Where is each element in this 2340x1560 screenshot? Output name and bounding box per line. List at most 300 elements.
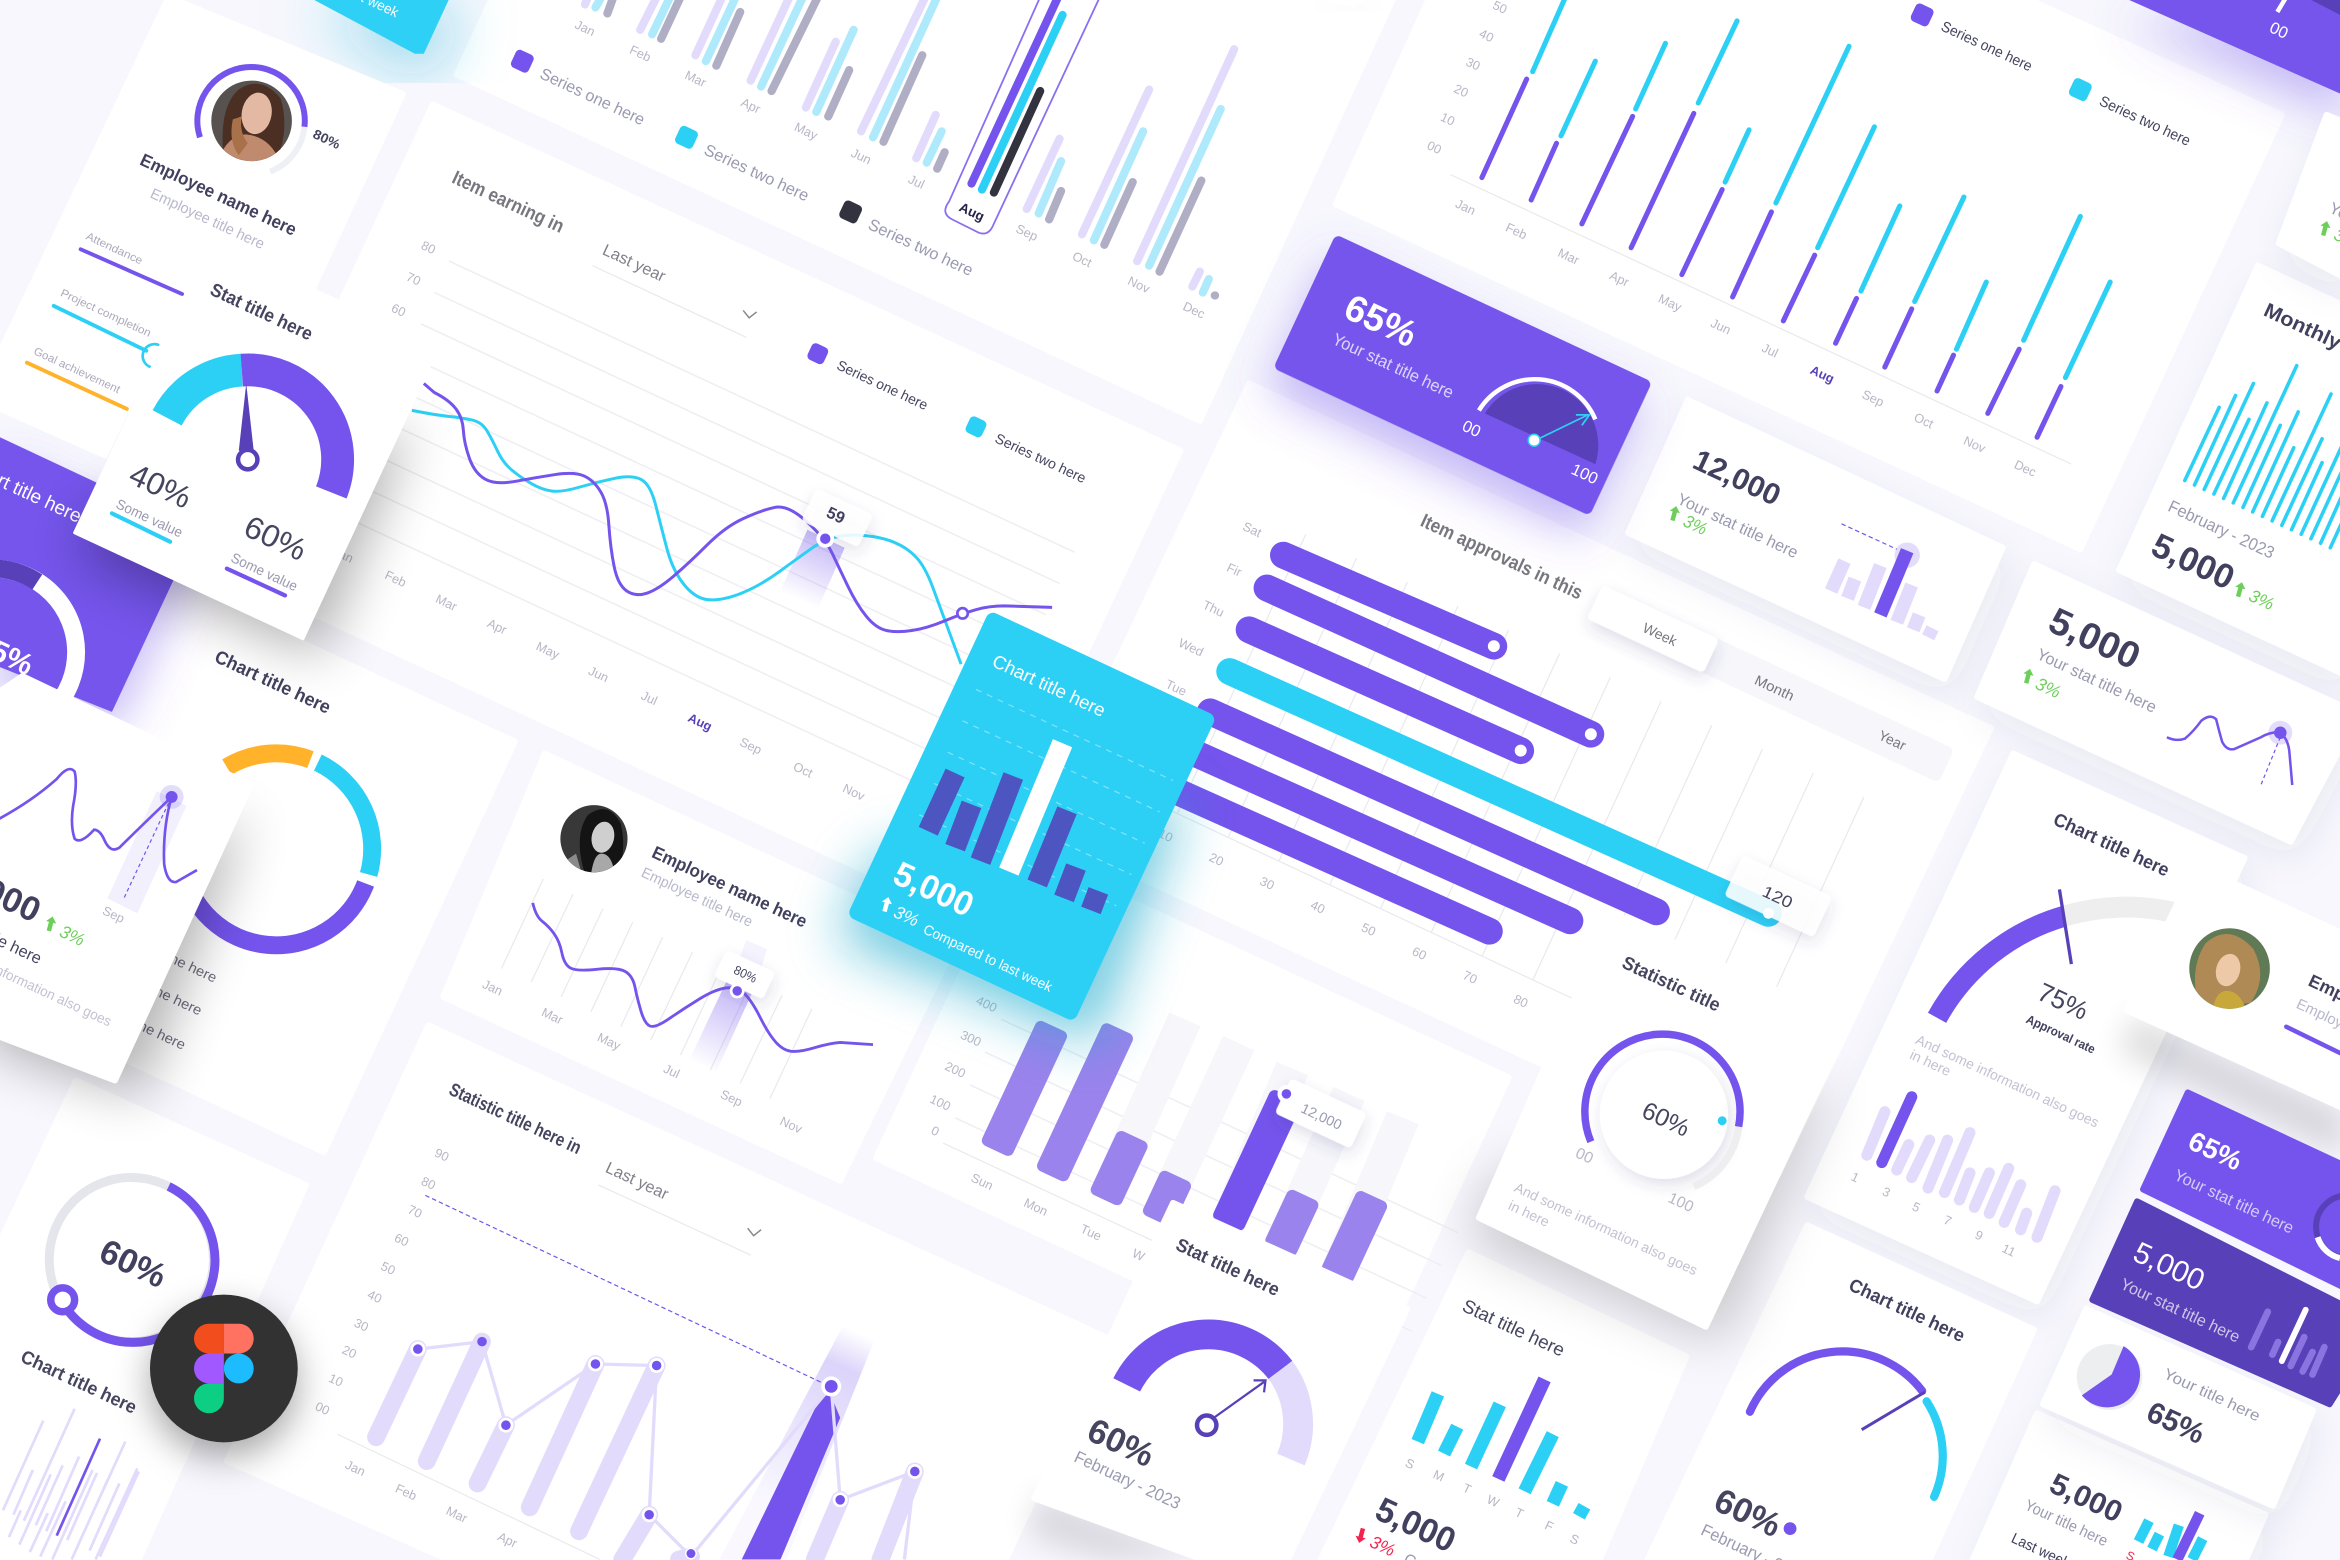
connecting line — [418, 1342, 915, 1560]
progress — [2286, 1027, 2340, 1058]
month labels: Dec — [1181, 299, 1207, 322]
panel: 5,000 compact card: Your title here — [2022, 1497, 2111, 1550]
day labels — [1163, 519, 1264, 699]
change — [879, 896, 922, 931]
panel: statistic ring card: Statistic title — [1619, 952, 1724, 1015]
progress: project completion — [54, 287, 158, 367]
heading: Item approvals in this — [1417, 510, 1586, 604]
heading: Item earning in — [449, 167, 567, 238]
day labels: Thu — [1200, 598, 1226, 620]
purple bar segments — [1482, 79, 2061, 437]
panel: stacked bar chart top right — [1336, 0, 2282, 549]
cyan card glow — [836, 798, 1186, 1045]
x axis labels: May — [1656, 292, 1684, 315]
x axis labels: Dec — [2012, 457, 2038, 480]
y axis labels — [389, 238, 438, 320]
day labels: S — [1403, 1456, 1417, 1472]
day labels: Mon — [1022, 1196, 1050, 1219]
x axis labels: Apr — [495, 1530, 520, 1551]
day labels: Wed — [1130, 1246, 1159, 1270]
legend: Series one here — [1938, 18, 2035, 75]
marker — [1784, 1522, 1796, 1535]
legend — [509, 48, 976, 280]
panel: purple 65% gauge stat card: 65% — [1338, 286, 1424, 355]
x axis labels: 30 — [1258, 874, 1276, 893]
panel: statistic title here line chart: Statistic title here in — [446, 1078, 585, 1158]
gauge: 100 — [1568, 460, 1601, 488]
day labels: M — [1431, 1467, 1446, 1485]
panel: purple 65% stat card right: Your stat title here — [2171, 1166, 2296, 1237]
cyan bar segments — [1533, 0, 2110, 378]
x axis labels: Apr — [485, 616, 510, 638]
tabs: Year — [1876, 728, 1908, 754]
bar chart: 5 — [1910, 1199, 1922, 1215]
value: 12,000 — [1688, 444, 1786, 513]
pie chart — [2077, 1344, 2142, 1410]
month labels: Sep — [1014, 222, 1040, 244]
month labels: Mar — [539, 1005, 566, 1028]
panel: employee card right — [2127, 866, 2340, 1109]
employee card shadow — [2119, 1015, 2340, 1157]
change: 3% — [1680, 511, 1710, 539]
icon: figma logo badge — [150, 1295, 298, 1442]
panel: statistic ring card: 00 — [1573, 1145, 1596, 1168]
dropdown: Last year — [603, 1159, 672, 1204]
tooltip 120 — [1724, 855, 1832, 937]
dropdown: Last year — [600, 241, 669, 286]
month labels: Jul — [661, 1062, 682, 1081]
month labels: Jan — [480, 977, 505, 999]
panel: statistic ring card: in here — [1506, 1198, 1552, 1231]
panel: chart ring 60% bottom left: Chart title here — [18, 1346, 140, 1418]
legend: Series one here — [118, 928, 219, 987]
month labels: Jun — [849, 146, 873, 167]
legend: Series one here — [537, 65, 647, 129]
x axis labels: May — [534, 639, 562, 662]
x axis labels: Feb — [1503, 220, 1529, 242]
avatar — [2189, 928, 2270, 1009]
bar chart: 9 — [1973, 1228, 1985, 1244]
panel: statistic ring card: And some information also goes — [1512, 1180, 1700, 1279]
x axis labels: Jan — [331, 544, 355, 566]
panel: series bar chart top — [457, 0, 1394, 421]
avatar with progress ring — [197, 67, 343, 172]
y axis labels: 10 — [1438, 110, 1457, 129]
month labels: Feb — [627, 43, 653, 65]
panel: cyan chart card: Compared to last week — [921, 922, 1055, 996]
small card top edge — [1313, 0, 1365, 7]
avatar with progress ring: 80% — [311, 126, 343, 152]
bars — [1418, 1379, 1584, 1516]
panel: cyan card top — [267, 0, 451, 54]
panel: 75% approval gauge — [1807, 754, 2244, 1301]
x axis labels — [331, 544, 867, 804]
progress: goal achievement — [27, 346, 127, 409]
negative change — [1354, 1527, 1398, 1560]
x axis labels — [1453, 197, 2038, 480]
legend — [806, 342, 1088, 487]
gauge — [1459, 379, 1601, 488]
change — [2233, 581, 2277, 614]
donut — [182, 753, 372, 945]
month labels: May — [792, 120, 820, 143]
panel: sparkline stat card left — [0, 676, 251, 1080]
x axis labels: Nov — [1961, 434, 1988, 456]
month labels: Mar — [683, 68, 709, 90]
x axis labels: Mar — [1556, 246, 1582, 268]
y axis labels: 30 — [352, 1316, 371, 1335]
panel: statistic ring card — [1479, 913, 1849, 1327]
x axis labels: Oct — [1912, 410, 1936, 432]
day labels: T — [1461, 1481, 1474, 1497]
panel: chart gauge 60% bottom: Chart title here — [1846, 1274, 1968, 1346]
highlighted column — [780, 530, 845, 609]
note: And some information also goes — [1913, 1032, 2101, 1131]
tabs — [1587, 585, 1954, 783]
x axis labels: Apr — [1607, 269, 1632, 290]
month labels: Sep — [718, 1087, 744, 1109]
change — [2021, 667, 2064, 702]
month labels: Jul — [906, 172, 927, 192]
x axis labels: Oct — [791, 760, 815, 781]
y axis labels — [1425, 0, 1509, 157]
panel: item earning line chart — [216, 104, 1180, 916]
month labels: Apr — [739, 95, 763, 117]
tooltip 80%: 80% — [731, 963, 759, 986]
month labels: Nov — [1125, 274, 1152, 296]
y axis labels: 20 — [340, 1343, 359, 1361]
progress: attendance — [81, 231, 182, 294]
bar chart — [1849, 1097, 2055, 1260]
panel: cyan chart card: 5,000 — [888, 855, 979, 925]
y axis labels: 300 — [958, 1028, 983, 1049]
day labels — [1403, 1456, 1581, 1548]
bars — [376, 1342, 915, 1560]
panel: chart gauge 60% bottom: 60% — [1708, 1482, 1787, 1545]
x axis labels: Feb — [383, 568, 408, 590]
panel: 5,000 compact card — [1973, 1413, 2265, 1560]
x axis labels: Nov — [840, 781, 867, 804]
tabs: Week — [1640, 620, 1680, 650]
cyan series line — [412, 410, 961, 664]
panel: chart ring 60% bottom left — [0, 1080, 306, 1560]
gauge card shadow — [82, 425, 410, 657]
label 00 top right — [2267, 0, 2340, 43]
bar chart: 1 — [1849, 1170, 1861, 1185]
panel: stat bars S M T W: Stat title here — [1459, 1295, 1568, 1361]
x axis labels: Aug — [686, 711, 714, 734]
highlighted month: Aug: Aug — [957, 200, 987, 224]
panel: purple 65% stat card right — [2143, 1092, 2340, 1288]
legend: Series one here — [86, 995, 188, 1054]
open marker — [957, 608, 968, 619]
y axis labels: 0 — [929, 1123, 941, 1139]
y axis labels: 20 — [1452, 82, 1470, 100]
y axis labels: 50 — [379, 1259, 397, 1278]
panel: dark purple 5,000 stat card — [2092, 1201, 2340, 1404]
panel: chart donut left: Chart title here — [212, 646, 334, 718]
month labels: Nov — [778, 1114, 805, 1137]
gauge — [1127, 1334, 1298, 1460]
day labels: Sat — [1240, 519, 1264, 540]
panel: dark purple 5,000 stat card: Your stat title here — [2117, 1275, 2243, 1346]
value: 5,000 — [2146, 526, 2240, 597]
x axis labels: Feb — [393, 1481, 419, 1503]
gauge: 00 — [1459, 417, 1483, 441]
highlight column — [689, 977, 754, 1072]
role: Employee title here — [148, 185, 267, 253]
panel: stat gauge 60% center: February - 2023 — [1071, 1447, 1184, 1513]
highlighted month: Aug — [945, 0, 1100, 234]
ring — [0, 568, 76, 736]
bar chart: 3 — [1880, 1185, 1892, 1200]
markers — [410, 1337, 922, 1560]
day labels: Wed — [1176, 636, 1206, 659]
heading: Chart title here — [2050, 808, 2173, 880]
panel: 5,000 sparkline stat card — [1977, 564, 2340, 842]
day labels: Sun — [969, 1171, 995, 1193]
day labels — [969, 1171, 1159, 1270]
role: Employee title here — [639, 864, 755, 931]
panel: stat gauge card: Stat title here — [207, 279, 316, 344]
change: 3% — [57, 921, 88, 950]
panel: cyan chart card — [847, 610, 1217, 1022]
y axis labels: 400 — [974, 994, 999, 1015]
change — [1667, 505, 1710, 539]
progress: attendance: Attendance — [84, 231, 144, 267]
y axis labels: 60 — [392, 1231, 411, 1249]
bar chart: 11 — [2000, 1241, 2018, 1260]
month labels: Jan — [573, 18, 597, 39]
sparkline card shadow — [0, 813, 246, 1097]
subtitle: Your stat title here — [2034, 645, 2159, 717]
horizontal bars — [1149, 555, 1768, 931]
statistic ring card shadow — [1470, 1082, 1828, 1343]
tooltip 12,000 — [1275, 1078, 1367, 1149]
panel: stat gauge card: Some value — [113, 497, 185, 541]
gauge — [167, 370, 338, 492]
panel: 5,000 compact card: 5,000 — [2045, 1467, 2127, 1529]
tabs: Month — [1752, 673, 1796, 705]
x axis labels: 20 — [1207, 850, 1226, 869]
legend: Series one here — [103, 961, 204, 1019]
dropdown — [598, 1159, 761, 1255]
panel: purple 65% stat card right: 65% — [2184, 1125, 2247, 1176]
panel: employee mini line chart — [482, 805, 874, 1132]
x axis labels: 80 — [1511, 992, 1530, 1011]
x axis labels — [1156, 826, 1530, 1011]
label: Approval rate — [2024, 1012, 2097, 1057]
progress: project completion: Project completion — [58, 287, 153, 340]
legend: Series two here — [2097, 93, 2193, 150]
y axis labels: 30 — [1464, 55, 1482, 73]
curve — [533, 903, 873, 1051]
background columns — [1104, 1019, 1403, 1277]
panel: item approvals chart — [1037, 384, 1991, 1174]
tooltip 120: 120 — [1759, 883, 1795, 912]
gauge arc — [1937, 889, 2177, 1018]
sparkline — [0, 769, 197, 913]
y axis labels — [928, 994, 999, 1139]
sparkline — [2167, 717, 2292, 785]
x axis labels: 40 — [1308, 898, 1327, 917]
bars — [2185, 366, 2340, 548]
y axis labels: 80 — [419, 1174, 438, 1193]
bars: light series — [585, 0, 1234, 295]
panel: stat gauge 60% center: 60% — [1082, 1411, 1160, 1475]
mini bar chart — [1831, 524, 1933, 637]
x axis labels — [343, 1458, 520, 1551]
highlighted bar — [742, 1392, 840, 1560]
y axis labels: 200 — [943, 1059, 968, 1081]
name: Employee name here — [137, 150, 300, 240]
x axis labels: Jun — [586, 664, 611, 685]
day labels: F — [1543, 1518, 1556, 1534]
y axis labels: 70 — [404, 270, 423, 288]
negative change: 3% — [1367, 1532, 1398, 1560]
date: February - 2023 — [2165, 496, 2278, 563]
panel: chart ring 60% bottom left: 60% — [94, 1232, 172, 1296]
panel: purple donut card left — [0, 437, 197, 736]
panel: employee card top left — [24, 33, 384, 458]
month labels — [573, 18, 1207, 322]
x axis labels: Jan — [343, 1458, 367, 1479]
panel: stat bars S M T W: 5,000 — [1370, 1491, 1461, 1560]
panel: your title pie card: 65% — [2142, 1396, 2210, 1451]
subtitle: Your stat title here — [1674, 490, 1801, 562]
panel: purple stat card top right — [2119, 0, 2340, 96]
panel: weekly column chart — [876, 849, 1509, 1386]
panel: dark purple 5,000 stat card: 5,000 — [2128, 1236, 2210, 1297]
y axis labels: 00 — [1425, 138, 1443, 157]
x axis labels: 60 — [1410, 944, 1429, 963]
y axis labels: 10 — [326, 1371, 345, 1390]
mini bars — [2124, 1513, 2203, 1560]
legend: Series two here — [992, 431, 1088, 487]
panel: stat gauge card — [75, 243, 439, 639]
x axis labels: Jul — [639, 689, 659, 708]
panel: stat gauge card: Some value — [228, 550, 300, 595]
y axis labels: 70 — [406, 1202, 424, 1221]
change — [44, 915, 88, 950]
ring — [49, 1177, 215, 1342]
x axis labels: Jun — [1708, 316, 1733, 337]
columns — [980, 1019, 1389, 1285]
progress: goal achievement: Goal achievement — [32, 346, 123, 397]
y axis labels: 40 — [365, 1288, 384, 1306]
day labels: Tue — [1078, 1222, 1104, 1244]
panel: purple 65% gauge stat card: Your stat title here — [1329, 329, 1457, 402]
y axis labels: 40 — [1477, 26, 1496, 45]
y axis labels: 80 — [419, 238, 438, 257]
x axis labels: Jan — [1453, 197, 1478, 218]
day labels: Fir — [1225, 561, 1245, 580]
month labels: Oct — [1070, 249, 1094, 270]
panel: stat gauge 60% center: Stat title here — [1173, 1234, 1283, 1300]
x axis labels: Mar — [433, 592, 460, 614]
y axis labels — [313, 1146, 451, 1418]
legend: Series two here — [701, 141, 812, 205]
x axis labels: Jul — [1760, 341, 1780, 360]
dropdown — [592, 241, 757, 337]
change: 3% — [2032, 673, 2064, 702]
x axis labels: 10 — [1156, 826, 1175, 845]
panel: cyan chart card: Chart title here — [989, 650, 1109, 721]
label 00 top right: 00 — [2267, 19, 2291, 43]
value 60%: 60% — [239, 509, 312, 568]
month labels — [480, 977, 805, 1137]
panel: statistic title here line chart — [227, 1025, 1109, 1560]
panel: statistic ring card: 100 — [1665, 1190, 1696, 1216]
ring — [1585, 1034, 1740, 1186]
mini bars — [2251, 1310, 2324, 1374]
tooltip 12,000: 12,000 — [1298, 1101, 1344, 1134]
panel: small card top right — [2279, 115, 2340, 278]
panel: statistic ring card: 60% — [1638, 1097, 1694, 1143]
y axis labels: 60 — [389, 301, 408, 320]
value 40%: 40% — [124, 457, 197, 515]
legend: Series two here — [865, 216, 976, 280]
panel: your title pie card: Your title here — [2161, 1366, 2263, 1425]
x axis labels: 50 — [1359, 920, 1378, 939]
y axis labels: 00 — [313, 1399, 332, 1418]
change: 3% — [2246, 585, 2277, 614]
day labels: S — [1568, 1532, 1581, 1548]
ring — [2316, 1195, 2340, 1258]
day labels: Tue — [1163, 677, 1189, 699]
panel: stat bars S M T W — [1321, 1252, 1686, 1560]
day labels: T — [1513, 1505, 1526, 1521]
panel: 12,000 stat card — [1628, 400, 2003, 679]
bars — [928, 743, 1098, 910]
month labels: May — [595, 1030, 623, 1053]
legend — [1909, 2, 2193, 150]
x axis labels: Sep — [1860, 387, 1886, 410]
tooltip 59 — [801, 488, 873, 548]
value: 5,000 — [2043, 599, 2147, 677]
stat gauge card shadow — [1030, 1492, 1209, 1560]
name: Employee name here — [649, 842, 810, 932]
legend — [86, 928, 219, 1054]
note: in here — [1907, 1047, 1953, 1080]
panel: your title pie card — [2043, 1309, 2313, 1506]
x axis labels: 70 — [1461, 968, 1479, 987]
day labels: W — [1485, 1492, 1501, 1510]
panel: monthly income — [2119, 266, 2340, 675]
purple series line — [424, 384, 1052, 632]
line bars — [3, 1409, 139, 1560]
x axis labels: Aug — [1808, 363, 1836, 386]
panel: chart gauge 60% bottom — [1648, 1225, 2034, 1560]
tooltip 59: 59 — [824, 504, 848, 528]
y axis labels: 90 — [432, 1146, 451, 1164]
x axis labels: Sep — [737, 735, 764, 757]
highlight column — [719, 1325, 875, 1560]
panel: stat gauge 60% center — [1034, 1203, 1407, 1560]
avatar — [560, 804, 628, 875]
panel: sparkline stat card left: Sep — [100, 904, 127, 926]
panel: chart donut left — [0, 572, 515, 1152]
y axis labels: 100 — [928, 1092, 953, 1114]
bar chart: 7 — [1941, 1213, 1954, 1229]
panel: purple 65% gauge stat card — [1273, 234, 1652, 516]
gauge — [1750, 1351, 1943, 1497]
change: 3% — [891, 902, 922, 931]
legend: Series one here — [834, 358, 930, 414]
tooltip 80% — [714, 950, 775, 999]
x axis labels: Mar — [444, 1504, 470, 1526]
value: 75% — [2033, 977, 2093, 1026]
